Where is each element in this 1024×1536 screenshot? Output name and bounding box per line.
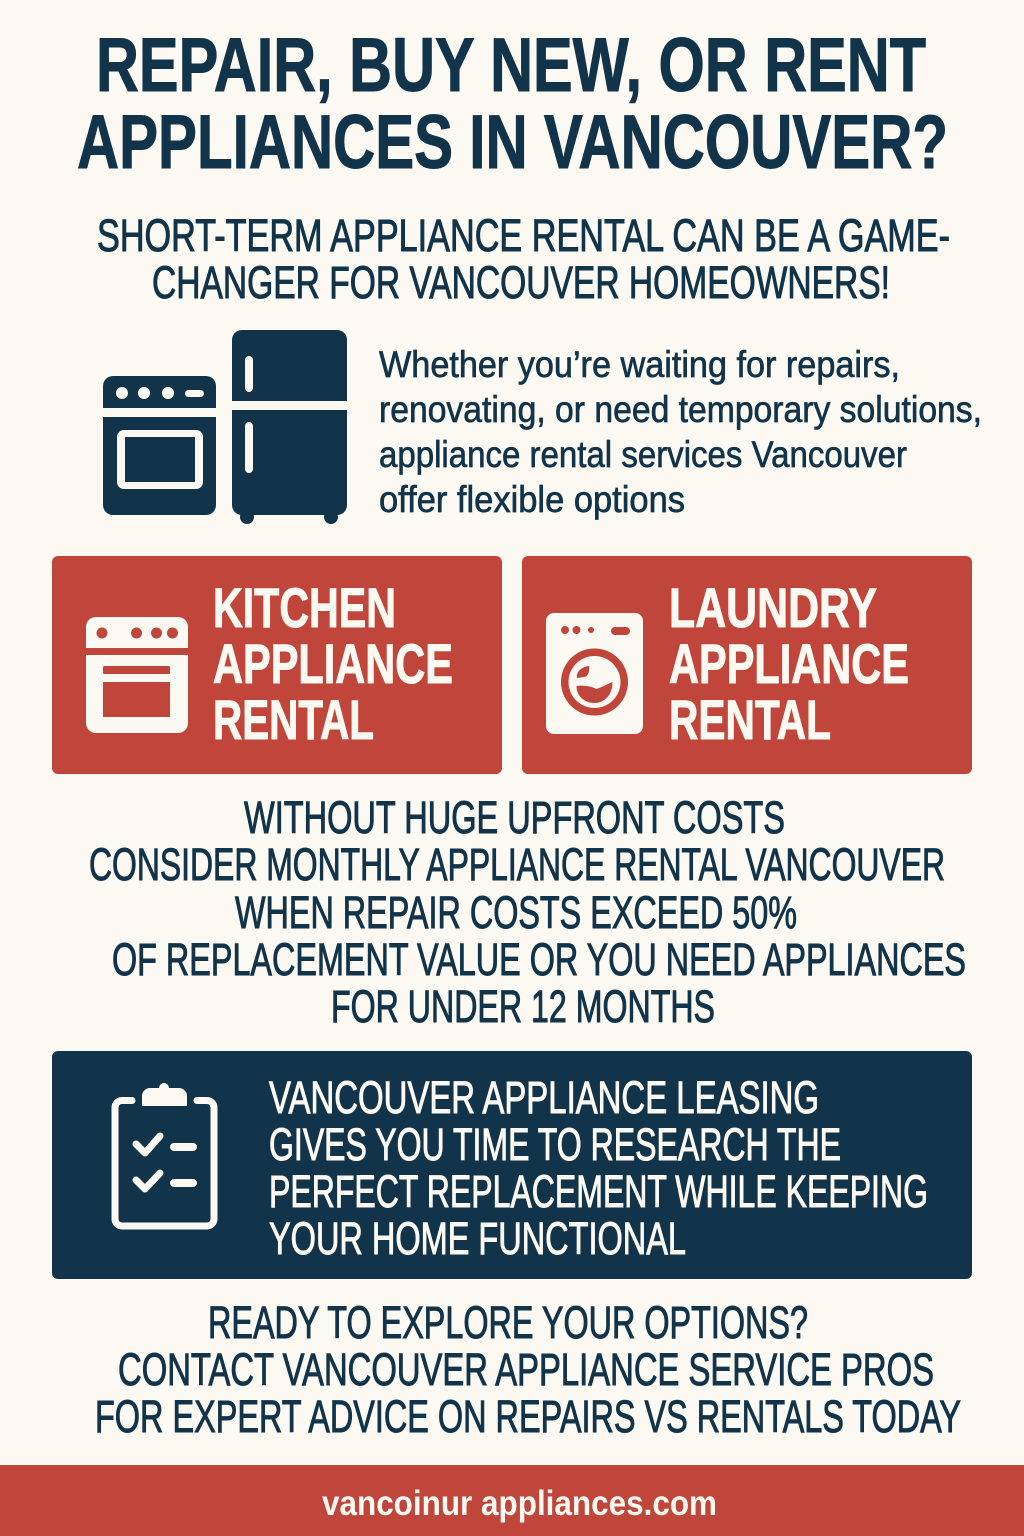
icon: stove and refrigerator bbox=[103, 330, 347, 524]
intro paragraph: Whether you’re waiting for repairs, bbox=[379, 344, 900, 385]
panel: kitchen appliance rental bbox=[52, 556, 502, 774]
middle text block bbox=[89, 792, 966, 1032]
icon: oven bbox=[86, 617, 188, 733]
intro paragraph bbox=[379, 344, 982, 520]
subtitle bbox=[97, 210, 950, 308]
call to action: READY TO EXPLORE YOUR OPTIONS? bbox=[208, 1297, 808, 1348]
panel heading: RENTAL bbox=[669, 688, 831, 751]
call to action bbox=[95, 1297, 961, 1442]
intro paragraph: renovating, or need temporary solutions, bbox=[379, 389, 982, 430]
icon: washing machine bbox=[546, 613, 643, 734]
panel heading bbox=[669, 576, 909, 751]
panel heading bbox=[213, 576, 453, 751]
panel heading: LAUNDRY bbox=[669, 576, 877, 639]
panel heading: APPLIANCE bbox=[669, 632, 909, 695]
intro paragraph: offer flexible options bbox=[379, 479, 685, 520]
icon: clipboard checklist bbox=[115, 1083, 214, 1226]
panel text: VANCOUVER APPLIANCE LEASING bbox=[269, 1072, 819, 1123]
icon: refrigerator bbox=[232, 330, 347, 524]
panel heading: APPLIANCE bbox=[213, 632, 453, 695]
intro paragraph: appliance rental services Vancouver bbox=[379, 434, 907, 475]
icon: stove bbox=[103, 376, 216, 515]
middle text block: FOR UNDER 12 MONTHS bbox=[331, 981, 715, 1032]
panel heading: KITCHEN bbox=[213, 576, 396, 639]
footer website: vancoinur appliances.com bbox=[322, 1484, 717, 1523]
panel text: YOUR HOME FUNCTIONAL bbox=[269, 1213, 686, 1264]
footer bar bbox=[0, 1465, 1024, 1536]
panel: appliance leasing bbox=[52, 1051, 972, 1279]
middle text block: WHEN REPAIR COSTS EXCEED 50% bbox=[235, 887, 797, 938]
title bbox=[77, 23, 948, 185]
panel heading: RENTAL bbox=[213, 688, 374, 751]
panel text bbox=[269, 1072, 928, 1264]
middle text block: WITHOUT HUGE UPFRONT COSTS bbox=[244, 792, 785, 843]
panel: laundry appliance rental bbox=[522, 556, 972, 774]
